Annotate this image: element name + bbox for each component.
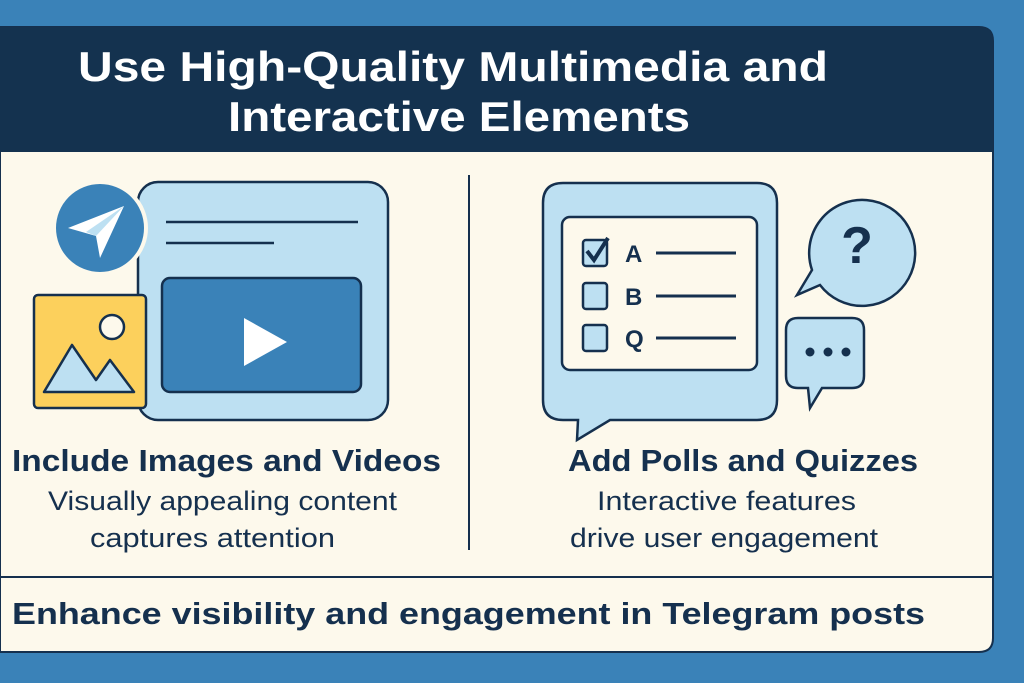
footer divider <box>0 576 993 578</box>
icon: image <box>34 295 146 408</box>
title: Interactive Elements <box>228 93 690 140</box>
text: images: Visually appealing content <box>48 486 398 516</box>
text: images <box>48 486 398 553</box>
icon: dots bubble <box>786 318 864 408</box>
heading: polls: Add Polls and Quizzes <box>568 443 918 478</box>
vertical divider <box>468 175 470 550</box>
icon: poll bubble <box>543 183 777 440</box>
icon: poll bubble: B <box>625 284 642 311</box>
icon: question bubble <box>797 200 915 306</box>
header bar <box>0 27 993 152</box>
icon: poll bubble: Q <box>625 326 644 353</box>
icon: question bubble: ? <box>841 217 873 275</box>
text: polls: Interactive features <box>597 486 856 516</box>
icon: telegram <box>54 182 146 274</box>
title <box>78 43 828 140</box>
footer text: Enhance visibility and engagement in Telegram posts <box>12 596 925 631</box>
text: images: captures attention <box>90 523 335 553</box>
text: polls: drive user engagement <box>570 523 879 553</box>
heading: images: Include Images and Videos <box>12 443 441 478</box>
icon: poll bubble: A <box>625 241 642 268</box>
text: polls <box>570 486 879 553</box>
title: Use High-Quality Multimedia and <box>78 43 828 90</box>
icon: media bubble <box>138 182 388 420</box>
